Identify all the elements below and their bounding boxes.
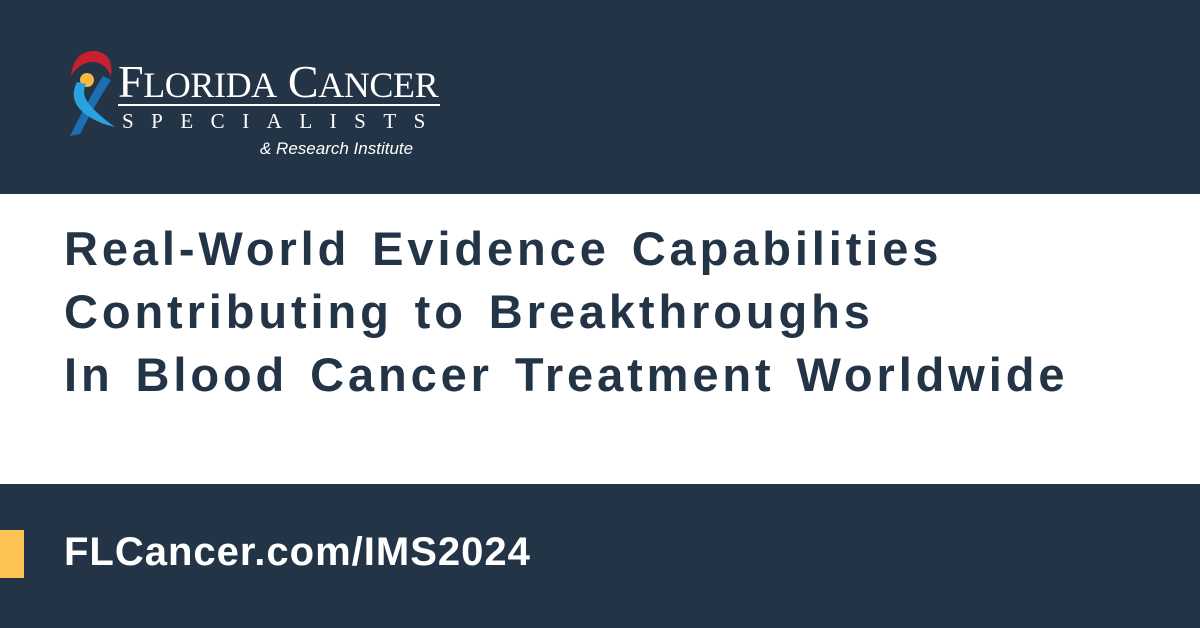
title xyxy=(64,222,1068,401)
icon: ribbon xyxy=(70,51,115,136)
logo text: Research Institute: & Research Institute xyxy=(260,139,413,158)
title: In Blood Cancer Treatment Worldwide xyxy=(64,348,1068,401)
logo text: Florida Cancer: FLORIDA CANCER xyxy=(118,56,438,107)
url: FLCancer.com/IMS2024 xyxy=(64,530,531,574)
white title band xyxy=(0,194,1200,484)
yellow accent bar xyxy=(0,530,24,578)
logo text: Specialists: SPECIALISTS xyxy=(122,109,443,133)
logo xyxy=(70,51,443,158)
title: Real-World Evidence Capabilities xyxy=(64,222,942,275)
title: Contributing to Breakthroughs xyxy=(64,285,874,338)
